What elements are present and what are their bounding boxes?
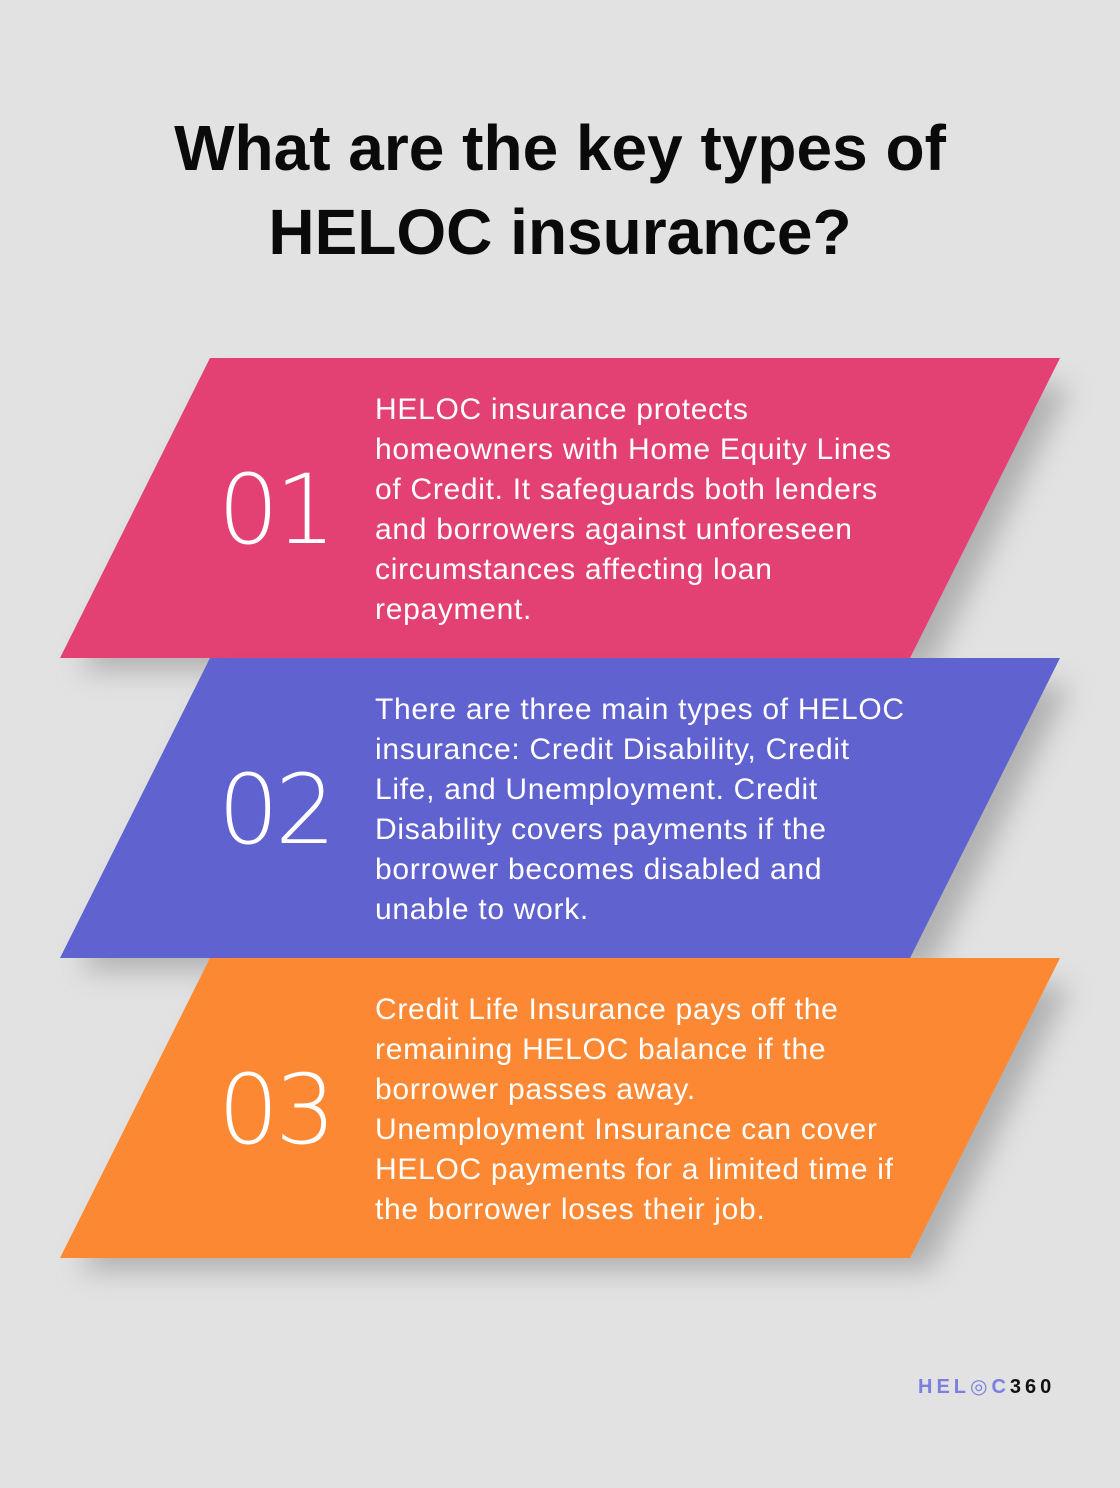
panel 3: orange bbox=[60, 958, 1070, 1270]
text 02: unable to work. bbox=[375, 893, 589, 926]
text 01: repayment. bbox=[375, 593, 532, 626]
text 02 bbox=[375, 693, 905, 926]
text 02: borrower becomes disabled and bbox=[375, 853, 822, 886]
text 01: and borrowers against unforeseen bbox=[375, 513, 853, 546]
text 03: Credit Life Insurance pays off the bbox=[375, 993, 839, 1026]
text 01: homeowners with Home Equity Lines bbox=[375, 433, 892, 466]
title: HELOC insurance? bbox=[268, 196, 852, 268]
text 01: HELOC insurance protects bbox=[375, 393, 749, 426]
text 02: insurance: Credit Disability, Credit bbox=[375, 733, 850, 766]
title bbox=[174, 112, 946, 268]
text 03: remaining HELOC balance if the bbox=[375, 1033, 826, 1066]
text 01: of Credit. It safeguards both lenders bbox=[375, 473, 878, 506]
panel 1: pink bbox=[60, 358, 1070, 670]
text 03: the borrower loses their job. bbox=[375, 1193, 765, 1226]
text 03: HELOC payments for a limited time if bbox=[375, 1153, 894, 1186]
title: What are the key types of bbox=[174, 112, 946, 184]
text 01 bbox=[375, 393, 892, 626]
text 03: borrower passes away. bbox=[375, 1073, 696, 1106]
number 01: 01 bbox=[218, 454, 332, 566]
text 03 bbox=[375, 993, 894, 1226]
text 02: Life, and Unemployment. Credit bbox=[375, 773, 818, 806]
text 01: circumstances affecting loan bbox=[375, 553, 773, 586]
number 03: 03 bbox=[218, 1054, 332, 1166]
text 02: There are three main types of HELOC bbox=[375, 693, 905, 726]
logo: HEL◎C360 bbox=[918, 1376, 1055, 1398]
number 02: 02 bbox=[218, 754, 332, 866]
text 03: Unemployment Insurance can cover bbox=[375, 1113, 878, 1146]
text 02: Disability covers payments if the bbox=[375, 813, 827, 846]
panel 2: purple bbox=[60, 658, 1070, 970]
